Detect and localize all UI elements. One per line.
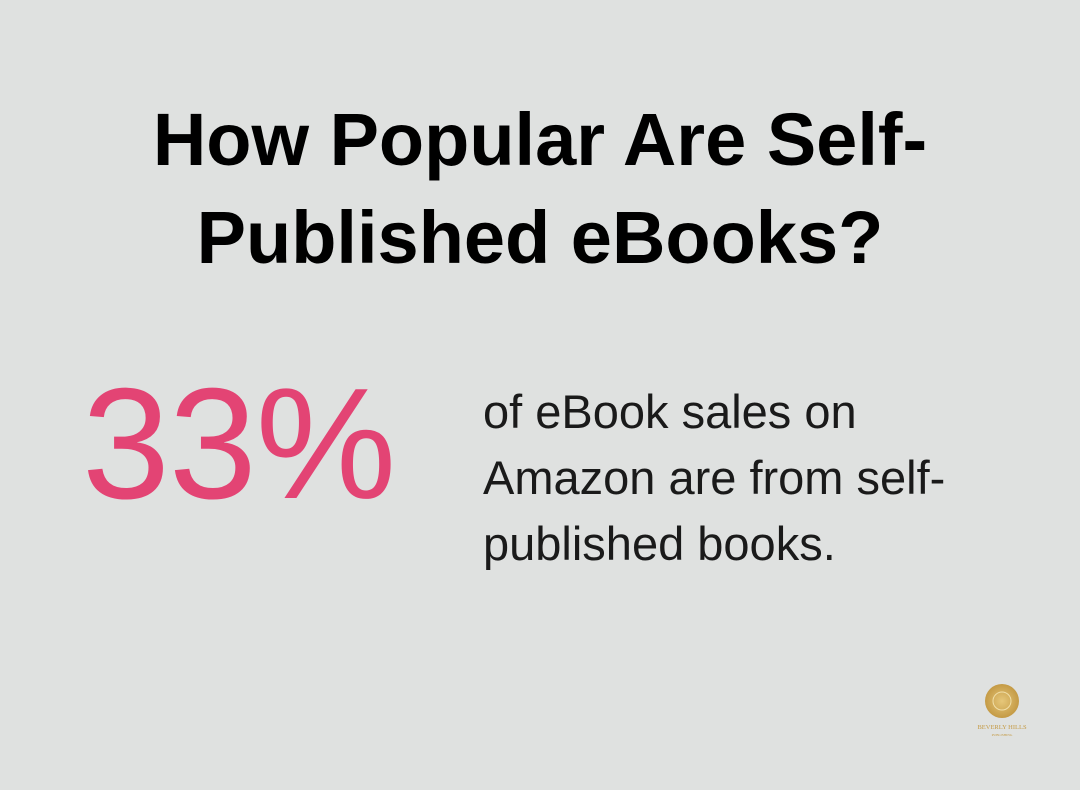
- title: How Popular Are Self-: [153, 98, 927, 181]
- big stat: 33%: 33%: [82, 356, 395, 532]
- logo: Beverly Hills Publishing: [977, 684, 1027, 737]
- stat description: Amazon are from self-: [483, 451, 945, 504]
- logo: Beverly Hills Publishing: PUBLISHING: [992, 733, 1013, 737]
- stat description: published books.: [483, 517, 836, 570]
- title: Published eBooks?: [197, 196, 883, 279]
- stat description: [483, 385, 945, 570]
- title: [153, 98, 927, 279]
- stat description: of eBook sales on: [483, 385, 857, 438]
- logo: Beverly Hills Publishing: BEVERLY HILLS: [977, 724, 1027, 731]
